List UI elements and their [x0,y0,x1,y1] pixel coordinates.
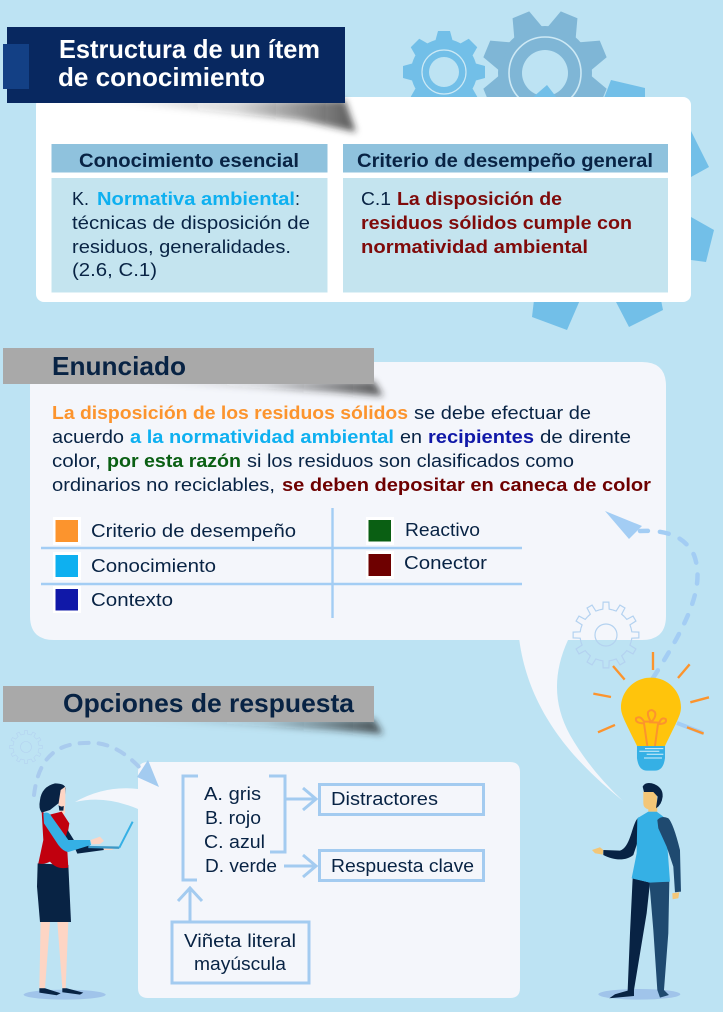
diagram: answer options [172,776,484,983]
legend: colour key [41,508,522,618]
text block: conocimiento esencial: : [295,189,300,209]
text block: options: C. azul [204,832,265,852]
text block: enunciado statement: recipientes [428,427,534,447]
header: criterio de desempeño general: Criterio de desempeño general [357,151,653,172]
header: criterio de desempeño general [343,144,668,172]
text block: conocimiento esencial: técnicas de disposición de [72,213,310,233]
legend item: criterio de desempeño: Criterio de desempeño [91,521,296,541]
text block: enunciado statement: a la normatividad ambiental [130,427,394,447]
icon: small top gear [403,31,485,113]
text block: criterio de desempeño [343,178,668,292]
legend item: contexto: Contexto [91,590,173,610]
text block: options: A. gris [204,784,261,804]
text block: enunciado statement: por esta razón [107,451,241,471]
text block: enunciado statement: color, [52,451,101,471]
text block: conocimiento esencial: K. [72,189,89,209]
illustration: man [592,783,681,1000]
text block: conocimiento esencial: residuos, generalidades. [72,237,291,257]
heading: estructura de un ítem de conocimiento: Estructura de un ítem [59,34,320,64]
box: distractores: Distractores [331,789,438,809]
box: viñeta literal mayúscula: mayúscula [194,954,287,974]
text block: enunciado statement: de dirente [540,427,631,447]
icon: outline gear left [10,731,42,763]
text block: enunciado statement: en [400,427,422,447]
text block: criterio de desempeño: La disposición de [397,189,562,209]
box: viñeta literal mayúscula [172,922,309,983]
text block: conocimiento esencial: Normativa ambiental [97,189,295,209]
legend item: conocimiento: Conocimiento [91,556,216,576]
legend item: criterio de desempeño [53,517,296,545]
text block: criterio de desempeño: normatividad ambiental [361,237,588,257]
text block: criterio de desempeño: residuos sólidos cumple con [361,213,632,233]
box: respuesta clave [320,850,484,880]
heading: estructura de un ítem de conocimiento [3,27,356,132]
text block: enunciado statement [52,403,651,495]
icon: outline gear above the lightbulb [573,602,639,668]
panel: item structure card [36,97,691,302]
legend item: conector: Conector [404,553,487,573]
heading: estructura de un ítem de conocimiento: de conocimiento [58,62,265,92]
icon: big top gear [481,9,609,137]
arrow: dashed arc from lightbulb to statement [605,511,703,733]
legend item: conocimiento [53,552,216,580]
text block: enunciado statement: La disposición de los residuos sólidos [52,403,408,423]
heading: enunciado: Enunciado [52,351,186,381]
heading: opciones de respuesta: Opciones de respuesta [63,688,355,718]
legend item: conector [366,551,487,579]
heading: opciones de respuesta [3,686,383,734]
header: conocimiento esencial: Conocimiento esencial [79,151,299,172]
panel: opciones de respuesta [75,762,520,998]
text block: enunciado statement: ordinarios no reciclables, [52,475,275,495]
heading: enunciado [3,348,383,396]
text block: enunciado statement: si los residuos son clasificados como [247,451,574,471]
icon: lightbulb with rays [593,652,709,771]
text block: conocimiento esencial [52,178,328,292]
text block: enunciado statement: se debe efectuar de [414,403,591,423]
text block: options: D. verde [205,856,277,876]
bracket lines [178,776,316,922]
box: viñeta literal mayúscula: Viñeta literal [184,931,296,951]
box: respuesta clave: Respuesta clave [331,856,474,876]
box: distractores [320,784,484,814]
icon: large light gear behind the card [532,80,714,330]
text block: criterio de desempeño: C.1 [361,189,391,209]
legend item: reactivo: Reactivo [405,520,480,540]
text block: enunciado statement: se deben depositar en caneca de color [282,475,651,495]
legend item: contexto [53,586,173,613]
illustration: woman [24,783,133,1000]
legend item: reactivo [366,517,480,545]
header: conocimiento esencial [52,144,328,172]
panel: enunciado speech bubble [30,362,666,801]
text block: options: B. rojo [205,808,261,828]
text block: enunciado statement: acuerdo [52,427,124,447]
text block: options [204,784,277,876]
text block: conocimiento esencial: (2.6, C.1) [72,260,157,280]
arrow: dashed arc from woman to options [34,743,159,795]
